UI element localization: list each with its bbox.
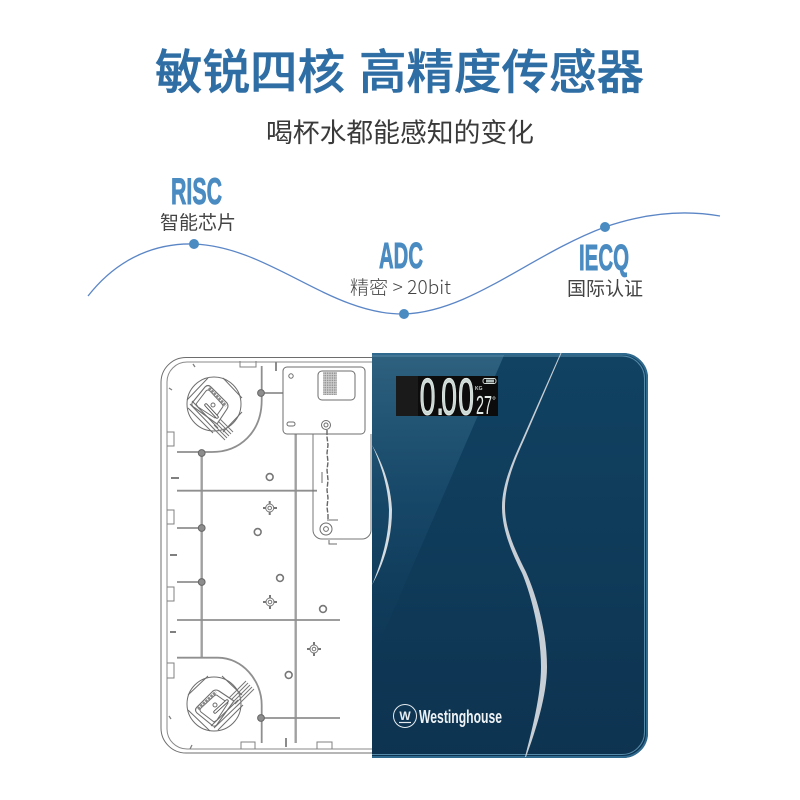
point: IECQ (567, 222, 643, 300)
point: RISC: 智能芯片 (160, 212, 236, 234)
point: RISC (160, 171, 236, 249)
subtitle: 喝杯水都能感知的变化 (266, 118, 534, 148)
LCD display: KG (475, 386, 483, 392)
point: ADC (350, 235, 451, 319)
LCD display (396, 367, 498, 426)
scale internals line drawing (161, 358, 372, 753)
title: 高精度传感器 (359, 47, 644, 100)
point: IECQ: IECQ (579, 237, 629, 278)
LCD display: 0.00 (420, 367, 474, 426)
point: ADC: 精密 > 20bit (350, 273, 451, 300)
point: IECQ: 国际认证 (567, 278, 643, 300)
title: 敏锐四核 (155, 47, 345, 100)
brand logo: Westinghouse (419, 707, 502, 727)
white body curves (502, 353, 562, 757)
LCD display: ° (492, 396, 496, 407)
load cell: top (187, 377, 242, 440)
housing clips (167, 361, 332, 749)
brand logo: W (399, 709, 411, 723)
rail nodes (198, 390, 264, 721)
load cell: bottom (187, 676, 254, 731)
circuit board (283, 367, 371, 544)
brand logo (394, 704, 502, 728)
internal rails (177, 366, 340, 743)
glass reflection (372, 353, 505, 660)
scale glass top (372, 353, 648, 758)
title (155, 47, 644, 100)
point: RISC: RISC (171, 171, 222, 212)
wave chart (88, 171, 720, 319)
mounting posts (254, 474, 326, 678)
LCD display: 27 (476, 390, 492, 420)
point: ADC: ADC (379, 235, 423, 276)
